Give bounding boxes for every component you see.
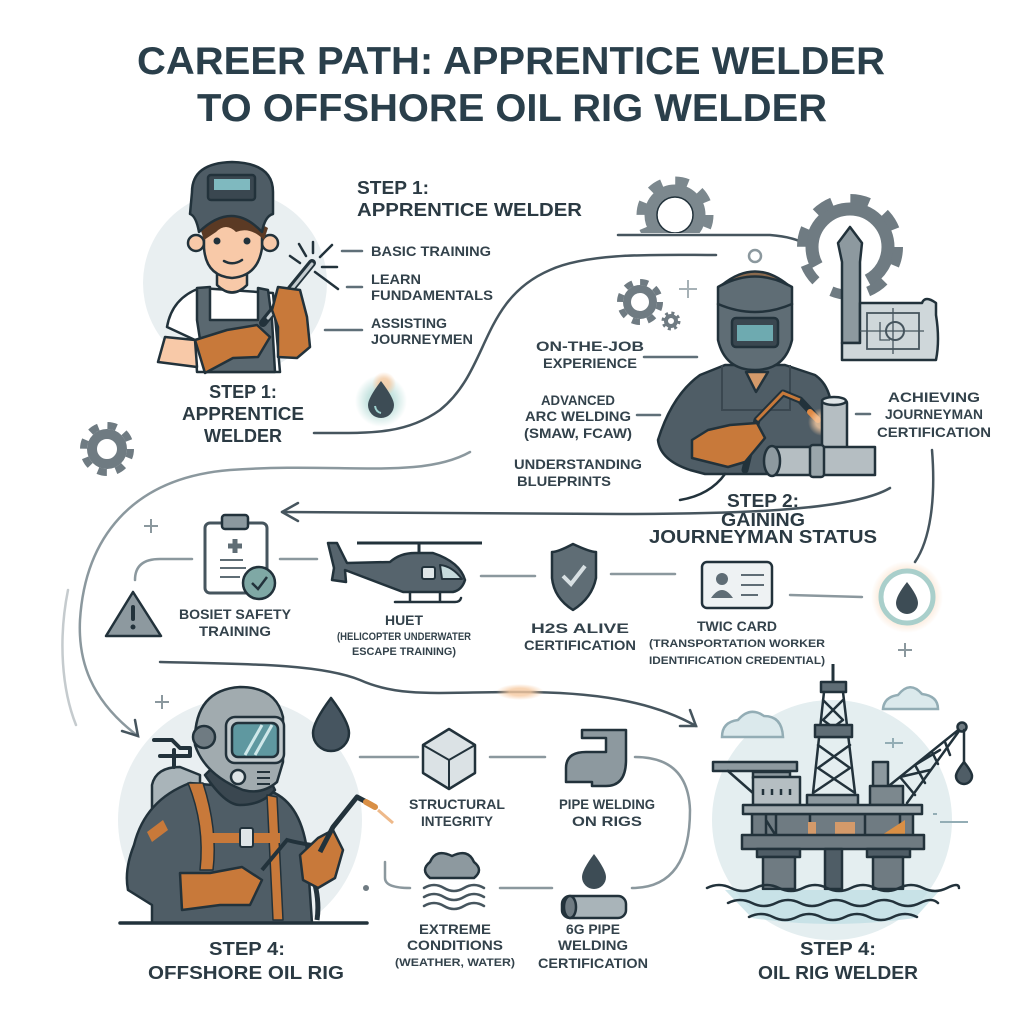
icon: glowing ring drop	[871, 561, 943, 633]
text: twic: IDENTIFICATION CREDENTIAL)	[649, 655, 825, 667]
text: h2s	[524, 620, 636, 653]
list: left items: UNDERSTANDING	[514, 456, 642, 472]
caption: step 4: STEP 4:	[209, 939, 285, 959]
title: CAREER PATH: APPRENTICE WELDER	[137, 40, 885, 83]
icon: offshore welder	[120, 687, 393, 923]
background circle	[143, 200, 327, 363]
highlight glow on path	[496, 684, 544, 700]
text: extreme conditions: EXTREME	[419, 921, 491, 937]
caption: step 4	[758, 939, 918, 983]
text: pipe welding: ON RIGS	[572, 813, 642, 829]
caption: step 2: STEP 2:	[727, 491, 799, 511]
icon: glowing drop	[355, 372, 407, 427]
panel: step 1 apprentice welder	[143, 162, 582, 446]
icon: small gears mid	[620, 280, 697, 329]
decorative marks	[885, 738, 968, 822]
text: achieving certification: JOURNEYMAN	[885, 406, 983, 422]
caption: step 1: APPRENTICE	[182, 404, 304, 424]
text: structural: INTEGRITY	[421, 813, 494, 829]
panel: step 2 journeyman	[514, 272, 991, 547]
icon: apprentice welder	[158, 162, 338, 373]
icon: id card	[702, 562, 772, 608]
text: achieving certification: ACHIEVING	[888, 389, 980, 405]
list: left items: ON-THE-JOB	[536, 338, 644, 354]
panel: step 3 certifications	[84, 426, 943, 709]
list: left items	[514, 338, 697, 489]
text: structural: STRUCTURAL	[409, 796, 505, 812]
text: extreme conditions: CONDITIONS	[407, 937, 503, 953]
icon: gear left	[84, 426, 130, 472]
icon: oil rig	[713, 664, 972, 889]
text: bosiet	[179, 606, 292, 639]
connector paths	[62, 235, 933, 736]
caption: step 2	[649, 491, 877, 547]
list: left items: ADVANCED	[541, 392, 615, 408]
list: step 1 items: JOURNEYMEN	[371, 331, 473, 347]
text: huet: HUET	[385, 612, 423, 628]
text: 6g pipe: CERTIFICATION	[538, 955, 648, 971]
dot	[363, 885, 369, 891]
icon: cloud and waves	[424, 853, 484, 909]
clouds	[722, 687, 938, 737]
text: structural	[409, 796, 505, 829]
icon: drop and pipe	[562, 854, 626, 918]
icon: shield	[552, 544, 596, 610]
icon: clipboard	[205, 515, 275, 599]
background circle	[712, 700, 952, 940]
icon: oil drop	[313, 698, 349, 751]
icon: warning triangle	[106, 592, 161, 636]
title: TO OFFSHORE OIL RIG WELDER	[197, 87, 827, 130]
caption: step 1: STEP 1:	[209, 382, 277, 402]
text: pipe welding	[559, 796, 655, 829]
caption: step 2: JOURNEYMAN STATUS	[649, 527, 877, 547]
icon: journeyman welder	[658, 272, 875, 500]
list: left items: EXPERIENCE	[543, 355, 637, 371]
icon: gear top centre	[641, 181, 709, 249]
icon: gear wrench blueprint	[802, 199, 938, 360]
list: left items: BLUEPRINTS	[517, 473, 611, 489]
list: step 1 items	[325, 243, 493, 347]
text: h2s: CERTIFICATION	[524, 637, 636, 653]
text: huet: (HELICOPTER UNDERWATER	[337, 631, 471, 643]
caption: step 2: GAINING	[721, 510, 805, 530]
heading: step 1 top: STEP 1:	[357, 178, 429, 198]
text: huet	[337, 612, 471, 658]
small dot	[749, 250, 761, 262]
background circle	[118, 704, 362, 918]
text: achieving certification: CERTIFICATION	[877, 424, 991, 440]
title	[137, 40, 885, 130]
list: step 1 items: LEARN	[371, 271, 421, 287]
text: h2s: H2S ALIVE	[531, 620, 629, 636]
panel: offshore skills	[360, 729, 690, 971]
list: left items: ARC WELDING	[525, 408, 631, 424]
text: extreme conditions: (WEATHER, WATER)	[395, 957, 515, 969]
waves	[707, 885, 959, 920]
caption: step 4: OFFSHORE OIL RIG	[148, 963, 344, 983]
caption: step 4: OIL RIG WELDER	[758, 963, 918, 983]
list: step 1 items: ASSISTING	[371, 315, 447, 331]
caption: step 1: WELDER	[204, 426, 282, 446]
caption: step 4	[148, 939, 344, 983]
caption: step 1	[182, 382, 304, 446]
connector: safety	[135, 559, 862, 597]
text: twic: (TRANSPORTATION WORKER	[649, 638, 825, 650]
connectors	[360, 757, 690, 888]
text: pipe welding: PIPE WELDING	[559, 796, 655, 812]
text: 6g pipe	[538, 921, 648, 971]
caption: step 4: STEP 4:	[800, 939, 876, 959]
text: extreme conditions	[395, 921, 515, 969]
panel: oil rig welder	[707, 664, 972, 983]
list: left items: (SMAW, FCAW)	[524, 425, 632, 441]
text: huet: ESCAPE TRAINING)	[352, 646, 456, 658]
text: bosiet: BOSIET SAFETY	[179, 606, 292, 622]
icon: helicopter	[328, 543, 482, 602]
text: twic	[649, 618, 825, 667]
text: twic: TWIC CARD	[697, 618, 777, 634]
text: achieving certification	[856, 389, 991, 440]
text: 6g pipe: 6G PIPE	[566, 921, 620, 937]
icon: pipe elbow	[566, 730, 626, 786]
list: step 1 items: BASIC TRAINING	[371, 243, 491, 259]
text: 6g pipe: WELDING	[558, 937, 628, 953]
list: step 1 items: FUNDAMENTALS	[371, 287, 493, 303]
water fill	[725, 890, 940, 924]
text: bosiet: TRAINING	[199, 623, 271, 639]
panel: step 4 offshore oil rig	[118, 687, 393, 983]
heading: apprentice welder: APPRENTICE WELDER	[357, 200, 582, 220]
icon: cube	[423, 729, 475, 789]
